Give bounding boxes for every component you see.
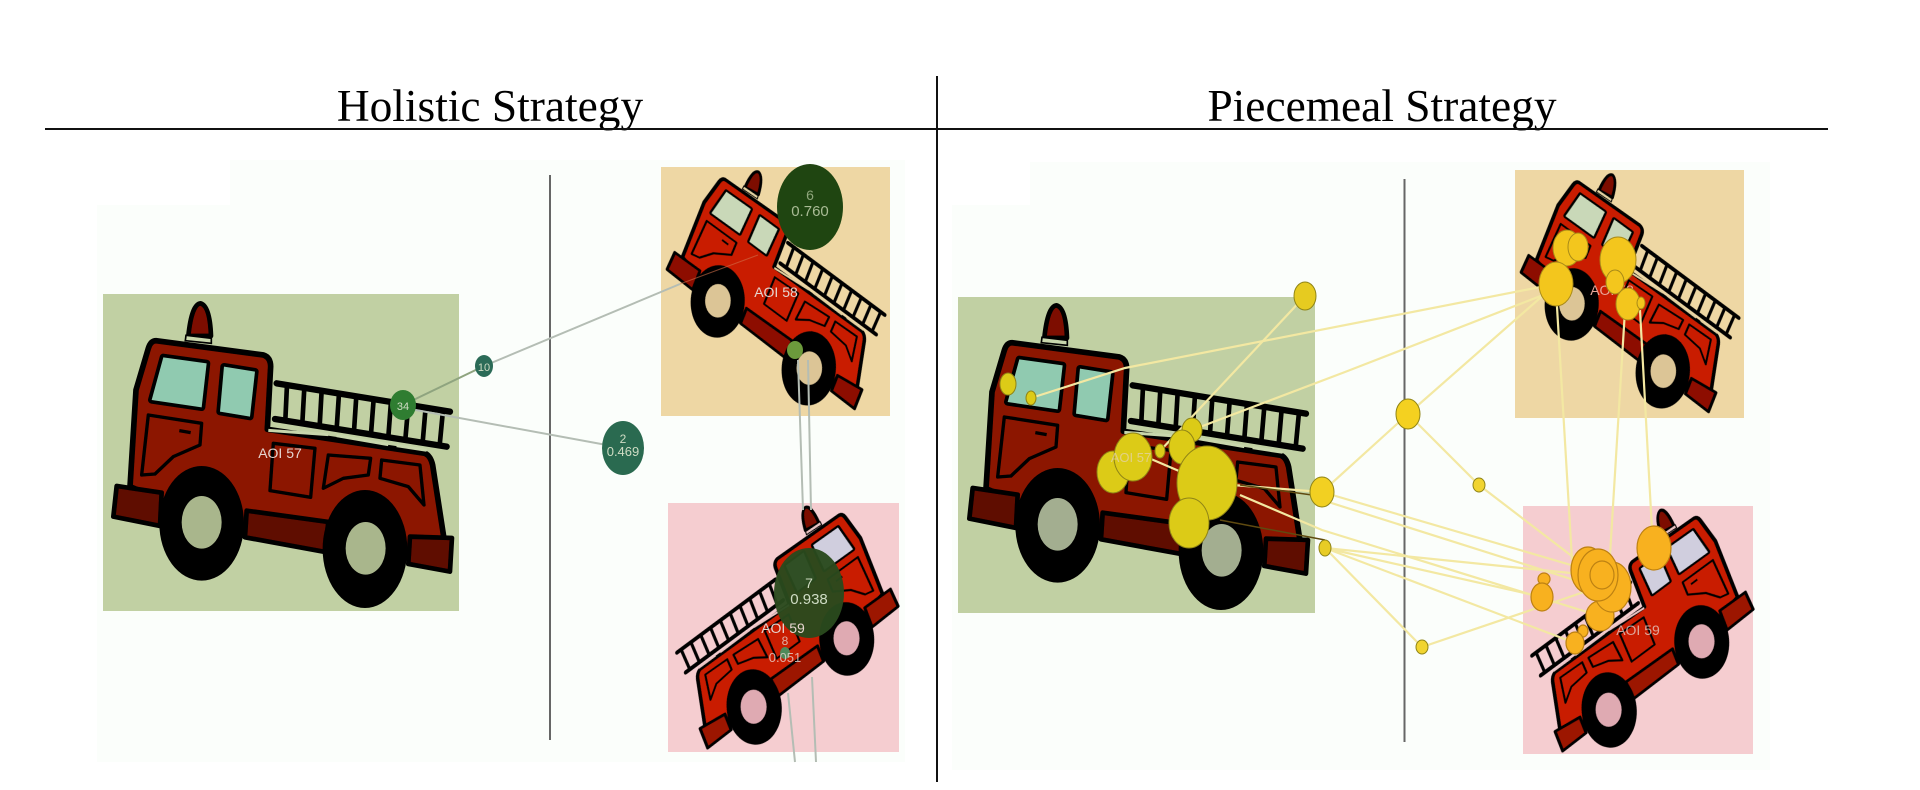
AOI labels: AOI 59	[761, 620, 805, 636]
fixation 7: 0.938	[790, 591, 828, 608]
AOI labels: AOI 58	[1590, 282, 1634, 298]
fixations on AOI 57: AOI 57	[1111, 450, 1151, 465]
fixation 7	[774, 548, 844, 638]
fixation 2	[602, 421, 644, 475]
heading: Piecemeal Strategy: Piecemeal Strategy	[1207, 81, 1557, 131]
AOI 59 panel	[1523, 506, 1753, 754]
AOI labels	[1590, 282, 1660, 638]
AOI labels: AOI 57	[258, 445, 302, 461]
center divider	[1404, 179, 1406, 742]
fixations between panels	[1294, 282, 1485, 654]
fire truck AOI 59	[655, 479, 916, 770]
fire truck AOI 59	[1510, 482, 1771, 773]
fixation 6: 0.760	[791, 203, 829, 220]
AOI 58 panel	[661, 167, 890, 416]
AOI 57 panel	[958, 297, 1315, 613]
fixations on AOI 57	[1000, 373, 1237, 548]
fixations on AOI 58	[1539, 230, 1645, 320]
scanpath lines	[403, 255, 816, 762]
fixation 3: 34	[397, 401, 409, 413]
AOI 58 panel	[1515, 170, 1744, 418]
panel: piecemeal strategy	[958, 81, 1771, 773]
AOI labels: AOI 59	[1616, 622, 1660, 638]
fire truck AOI 57	[969, 305, 1308, 610]
small fixation on AOI 58	[787, 341, 803, 359]
scanpath lines	[1031, 284, 1652, 647]
decorative photo backdrop	[97, 160, 1770, 770]
fixation 6: 6	[806, 187, 814, 203]
fixation 10: 10	[478, 362, 490, 374]
center divider	[549, 175, 551, 740]
AOI labels	[258, 284, 805, 636]
table rule: vertical	[936, 76, 938, 782]
panel: holistic strategy	[103, 81, 916, 770]
fire truck AOI 58	[1504, 147, 1760, 434]
AOI 57 panel	[103, 294, 459, 611]
fixation 2: 2	[620, 432, 627, 446]
fixation 6	[777, 164, 843, 250]
fire truck AOI 57	[113, 303, 452, 608]
fixation 8: 0.051	[769, 650, 801, 665]
AOI labels: AOI 58	[754, 284, 798, 300]
fixation 2: 0.469	[607, 444, 639, 459]
fixation 3	[390, 390, 416, 420]
fixations on AOI 59	[1531, 526, 1671, 654]
fixation 10	[475, 355, 493, 377]
heading: Holistic Strategy: Holistic Strategy	[337, 81, 643, 131]
table rule: horizontal	[45, 128, 1828, 130]
AOI 59 panel	[668, 503, 899, 752]
fixation 8	[769, 634, 801, 665]
fixation 7: 7	[805, 575, 813, 591]
fire truck AOI 58	[650, 144, 906, 431]
fixation 8: 8	[782, 634, 789, 648]
